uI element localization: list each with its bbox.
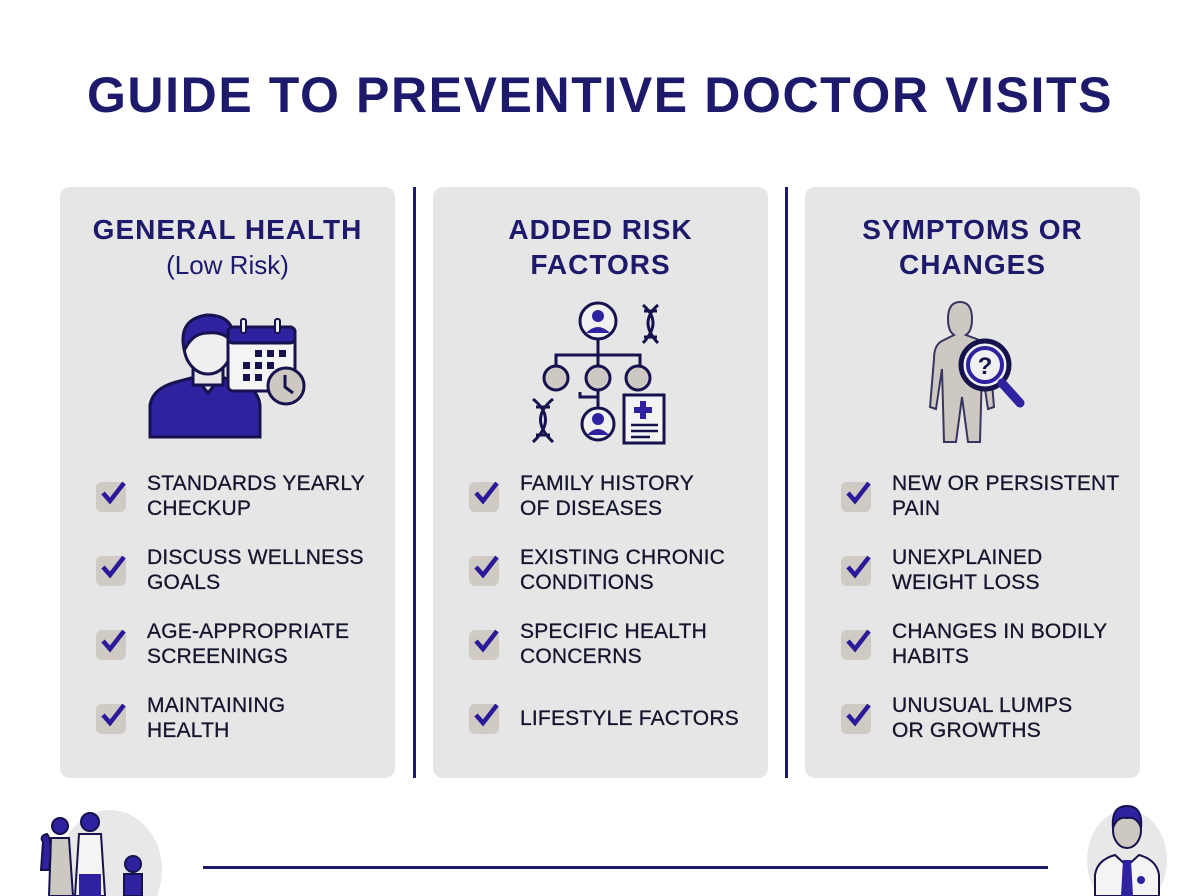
item [469, 704, 739, 734]
heading: symptoms or changes: CHANGES [899, 249, 1046, 280]
icon: body with magnifier [928, 301, 1024, 443]
icon: body with magnifier: ? [978, 353, 992, 380]
item: HEALTH [147, 719, 230, 742]
item: WEIGHT LOSS [892, 571, 1040, 594]
item [96, 472, 365, 520]
footer line [203, 866, 1048, 869]
heading: added risk factors: ADDED RISK [508, 214, 693, 245]
item: CONCERNS [520, 645, 642, 668]
item: CHECKUP [147, 497, 251, 520]
item: AGE-APPROPRIATE [147, 620, 349, 643]
item [841, 694, 1072, 742]
item: HABITS [892, 645, 969, 668]
title: GUIDE TO PREVENTIVE DOCTOR VISITS [87, 67, 1113, 123]
icon: family tree with DNA [532, 302, 666, 444]
item: GOALS [147, 571, 220, 594]
item [469, 620, 707, 668]
item: EXISTING CHRONIC [520, 546, 725, 569]
item: LIFESTYLE FACTORS [520, 707, 739, 730]
item [841, 620, 1107, 668]
heading: general health: GENERAL HEALTH [93, 214, 362, 245]
item [469, 472, 694, 520]
item: NEW OR PERSISTENT [892, 472, 1119, 495]
item: SPECIFIC HEALTH [520, 620, 707, 643]
panel: symptoms or changes [805, 187, 1140, 778]
item [96, 620, 349, 668]
item: UNUSUAL LUMPS [892, 694, 1072, 717]
item: STANDARDS YEARLY [147, 472, 365, 495]
item: PAIN [892, 497, 940, 520]
heading: added risk factors: FACTORS [530, 249, 671, 280]
item: OF DISEASES [520, 497, 662, 520]
item: FAMILY HISTORY [520, 472, 694, 495]
heading: symptoms or changes [862, 214, 1083, 280]
item: CHANGES IN BODILY [892, 620, 1107, 643]
item [96, 694, 285, 742]
panel: added risk factors [433, 187, 768, 778]
item: SCREENINGS [147, 645, 288, 668]
icon: family [40, 810, 162, 896]
item [841, 472, 1119, 520]
heading: general health: (Low Risk) [166, 250, 289, 280]
item [841, 546, 1042, 594]
item [469, 546, 725, 594]
icon: person with calendar [148, 314, 306, 438]
item: MAINTAINING [147, 694, 285, 717]
item: DISCUSS WELLNESS [147, 546, 364, 569]
item: OR GROWTHS [892, 719, 1041, 742]
item: UNEXPLAINED [892, 546, 1042, 569]
heading: general health [93, 214, 362, 280]
icon: doctor [1087, 805, 1167, 896]
panel: general health [60, 187, 395, 778]
item [96, 546, 364, 594]
heading: added risk factors [508, 214, 693, 280]
item: CONDITIONS [520, 571, 654, 594]
heading: symptoms or changes: SYMPTOMS OR [862, 214, 1083, 245]
